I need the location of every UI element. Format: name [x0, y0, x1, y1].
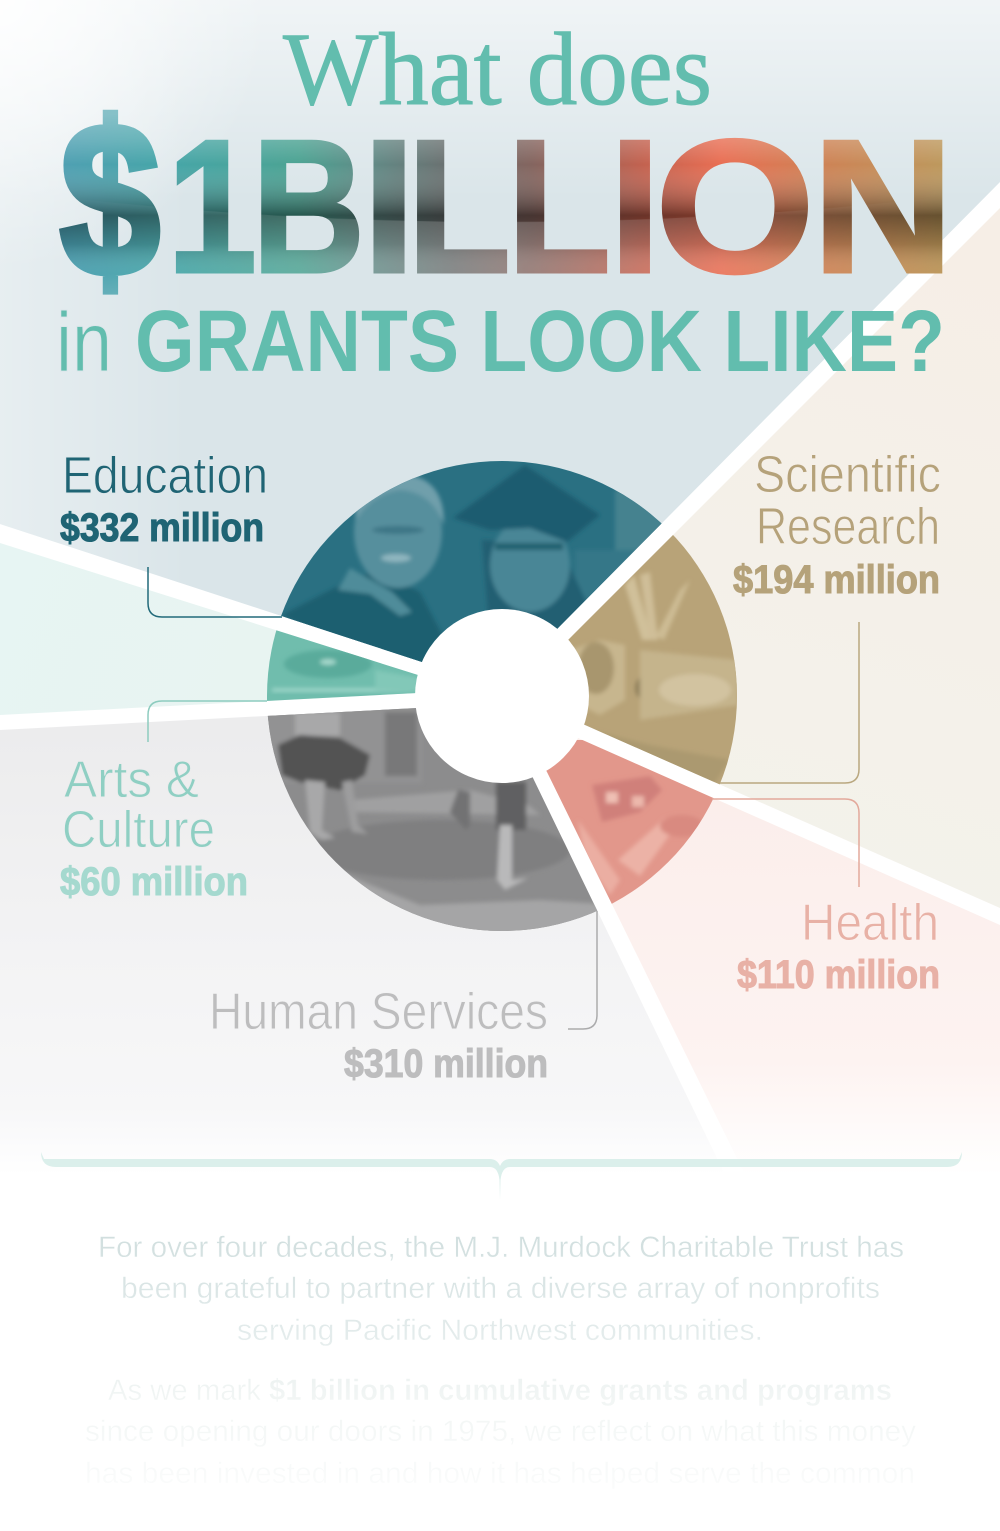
label: scientific research: Research [756, 498, 940, 556]
person bending [278, 735, 370, 790]
label: health: Health [801, 894, 939, 952]
background panel: arts and culture [0, 543, 502, 715]
chart centre hole [415, 609, 589, 783]
label: arts and culture [60, 751, 248, 904]
label: education [60, 447, 268, 550]
label: arts and culture: Culture [62, 801, 215, 859]
background panel: education [0, 0, 1000, 690]
background panel: health [510, 710, 1000, 1185]
title [56, 12, 954, 390]
background panel: scientific research [510, 208, 1000, 908]
mortarboard [453, 465, 600, 542]
title line: $1BILLION [60, 79, 954, 322]
label: scientific research: Scientific [754, 446, 941, 504]
segment: health photo [546, 740, 714, 904]
segment: arts and culture photo [267, 630, 418, 701]
graduate gown [482, 540, 586, 629]
title line: $1BILLION: I [609, 101, 661, 313]
background panel: human services [0, 700, 730, 1185]
label: health: $110 million [737, 953, 940, 997]
connector: human services [568, 911, 597, 1029]
body text: serving Pacific Northwest communities. [237, 1314, 763, 1347]
body text: since opening our doors in 1975, we reflect on what this money [85, 1415, 916, 1448]
label: arts and culture: Arts & [64, 751, 199, 809]
label: education: $332 million [60, 506, 264, 550]
body text: been grateful to partner with a diverse array of nonprofits [121, 1272, 880, 1305]
second person [496, 782, 526, 830]
title line: $1BILLION: L [407, 101, 511, 313]
title line: $1BILLION: N [812, 101, 954, 313]
title line: in GRANTS LOOK LIKE?: in [56, 295, 112, 389]
label: health [737, 894, 940, 997]
label: human services: $310 million [344, 1042, 548, 1086]
segment: human services photo [268, 708, 598, 931]
body text: For over four decades, the M.J. Murdock Charitable Trust has [98, 1231, 904, 1264]
body text [85, 1231, 916, 1490]
connector: scientific research [720, 622, 859, 783]
donut chart with photo segments [260, 455, 745, 940]
title line: $1BILLION: $ [60, 79, 160, 322]
segment: scientific research photo [568, 535, 737, 784]
connector: arts and culture [148, 701, 267, 742]
title line: What does: What does [283, 12, 712, 127]
title line: $1BILLION: 1 [167, 101, 257, 313]
title line: $1BILLION: B [252, 101, 365, 313]
body text: As we mark $1 billion in cumulative grants and programs [108, 1374, 892, 1407]
curly bracket [41, 1152, 962, 1200]
label: education: Education [62, 447, 268, 505]
label: scientific research: $194 million [733, 558, 940, 602]
label: human services: Human Services [209, 983, 548, 1041]
title line: $1BILLION: I [362, 101, 416, 313]
body text: has been invested in and how it has helped serve the common [85, 1457, 915, 1490]
label: scientific research [733, 446, 941, 602]
label: human services [209, 983, 548, 1086]
connector: health [712, 799, 859, 887]
title line: $1BILLION: L [507, 101, 611, 313]
connector: education [148, 567, 282, 617]
segment: education photo [281, 461, 662, 662]
title line: $1BILLION: O [655, 101, 815, 313]
man robe [282, 570, 445, 680]
label: arts and culture: $60 million [60, 860, 248, 904]
